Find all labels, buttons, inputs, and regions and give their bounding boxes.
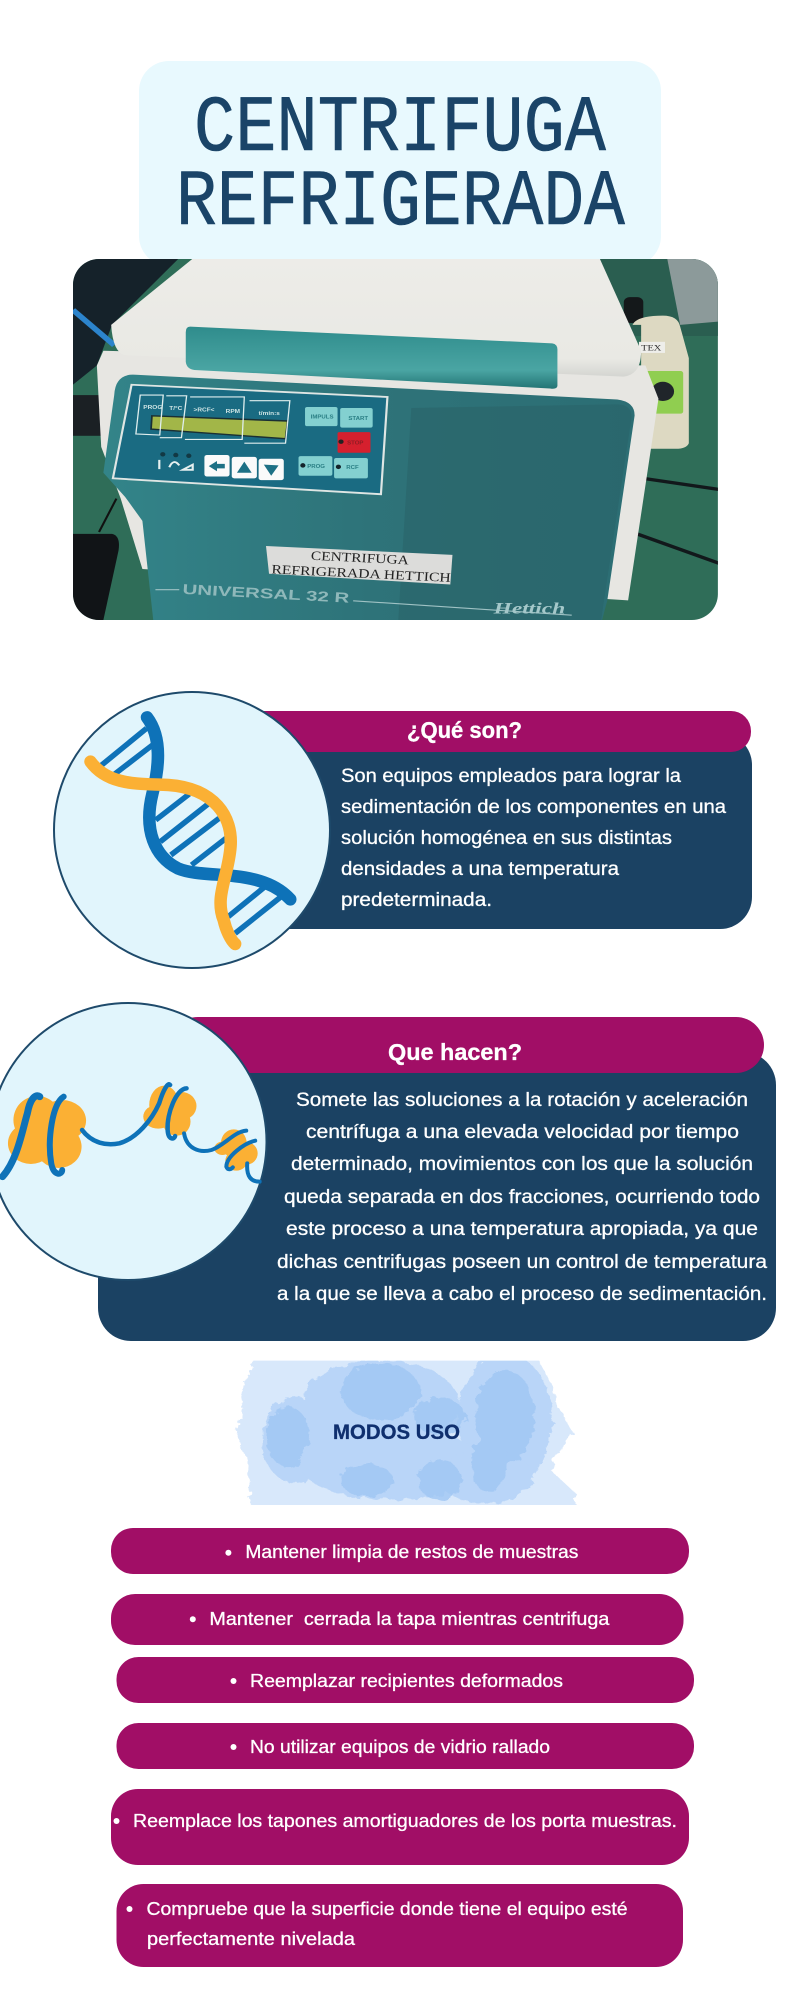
photo: refrigerated centrifuge: START [348, 417, 369, 422]
text block: que hacen [277, 1089, 767, 1305]
text block: que son: densidades a una temperatura [341, 859, 619, 880]
watercolor blob: modos uso [234, 1360, 577, 1505]
icon: dna circle [54, 692, 330, 968]
title [176, 84, 625, 249]
text block: que son: Son equipos empleados para lograr la [341, 766, 681, 787]
photo: refrigerated centrifuge: RPM [226, 409, 240, 415]
text block: que hacen: a la que se lleva a cabo el proceso de sedimentación. [277, 1283, 767, 1305]
list item 6 [116, 1884, 683, 1967]
text block: que son: predeterminada. [341, 890, 492, 911]
list item 5 [111, 1789, 689, 1865]
heading: que hacen: Que hacen? [388, 1039, 522, 1065]
text block: que son: solución homogénea en sus distintas [341, 828, 672, 849]
photo: refrigerated centrifuge: PROG [307, 464, 326, 470]
panel: que son body [250, 733, 752, 929]
text block: que hacen: Somete las soluciones a la rotación y aceleración [296, 1089, 748, 1111]
text block: que hacen: centrífuga a una elevada velocidad por tiempo [306, 1121, 739, 1143]
photo: refrigerated centrifuge: IMPULS [311, 415, 334, 420]
list item 5: Reemplace los tapones amortiguadores de los porta muestras. [133, 1811, 677, 1831]
list item 1: Mantener limpia de restos de muestras [245, 1542, 578, 1562]
list item 2 [111, 1594, 684, 1645]
photo: refrigerated centrifuge: CENTRIFUGA [310, 549, 410, 568]
photo: refrigerated centrifuge: UNIVERSAL 32 R [182, 582, 350, 606]
heading bar: que hacen [170, 1017, 764, 1073]
list item 4: No utilizar equipos de vidrio rallado [250, 1737, 550, 1757]
photo: refrigerated centrifuge: Hettich [492, 599, 565, 617]
text block: que hacen: este proceso a una temperatura apropiada, ya que [286, 1218, 758, 1240]
text block: que son [341, 766, 726, 911]
title panel [139, 61, 661, 266]
photo: refrigerated centrifuge: STOP [347, 441, 364, 447]
heading bar: que son [230, 711, 751, 752]
photo: refrigerated centrifuge: >RCF< [194, 408, 215, 413]
photo: refrigerated centrifuge: t/min:s [259, 411, 281, 417]
text block: que son: sedimentación de los componentes en una [341, 797, 726, 818]
heading: que son: ¿Qué son? [407, 717, 522, 743]
list item 4 [116, 1723, 694, 1769]
photo: refrigerated centrifuge: T/°C [169, 406, 183, 412]
title: REFRIGERADA [176, 158, 625, 249]
text block: que hacen: dichas centrifugas poseen un control de temperatura [277, 1251, 767, 1273]
list item 2: Mantener cerrada la tapa mientras centrifuga [209, 1609, 610, 1629]
photo: refrigerated centrifuge: RCF [346, 465, 359, 471]
title: CENTRIFUGA [194, 84, 606, 175]
photo: refrigerated centrifuge: TEX [641, 343, 661, 353]
heading: modos uso: MODOS USO [333, 1421, 460, 1444]
text block: que hacen: queda separada en dos fracciones, ocurriendo todo [284, 1186, 760, 1208]
photo: refrigerated centrifuge: PROG [143, 405, 163, 411]
photo: refrigerated centrifuge: REFRIGERADA HETTICH [271, 562, 451, 586]
icon: chromatin circle [0, 1003, 266, 1280]
text block: que hacen: determinado, movimientos con los que la solución [291, 1153, 753, 1175]
photo: refrigerated centrifuge [73, 259, 718, 620]
list item 3 [116, 1657, 694, 1703]
list item 3: Reemplazar recipientes deformados [250, 1671, 563, 1691]
list item 6: Compruebe que la superficie donde tiene el equipo esté [146, 1899, 628, 1919]
list item 1 [111, 1528, 689, 1574]
list item 6: perfectamente nivelada [147, 1929, 356, 1949]
panel: que hacen body [98, 1052, 776, 1341]
